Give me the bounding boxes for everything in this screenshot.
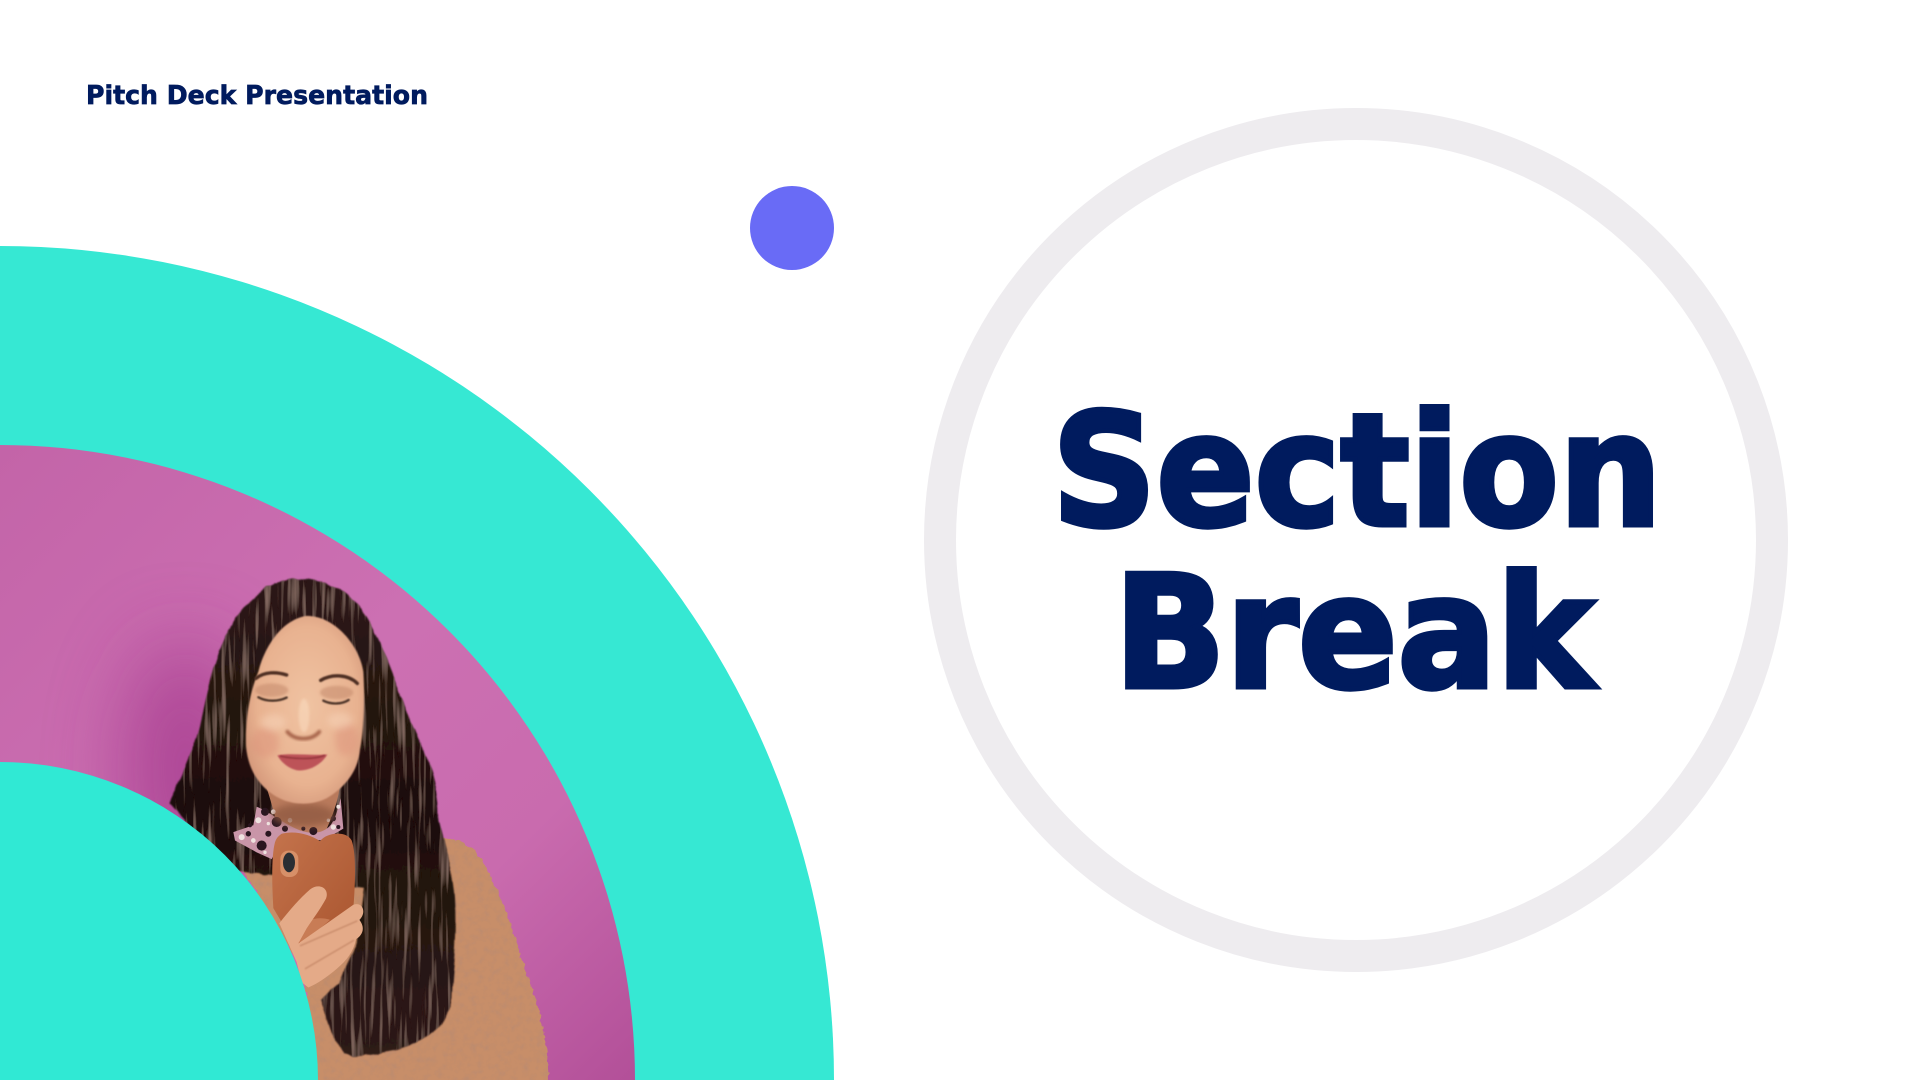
large outer teal quarter circle — [0, 246, 834, 1080]
purple backdrop — [0, 445, 640, 1080]
collar light petals — [239, 805, 340, 854]
eyelid shading — [255, 683, 288, 697]
finger creases — [300, 921, 357, 969]
heading line: Break: Break — [1114, 542, 1597, 724]
face shape — [246, 616, 364, 804]
left eyebrow — [256, 673, 287, 678]
inner teal quarter circle — [0, 762, 318, 1080]
phone lower bump — [299, 918, 330, 942]
left eye — [258, 697, 287, 701]
right eye — [323, 700, 349, 703]
photo panel: woman on purple backdrop — [0, 445, 640, 1080]
main heading — [1052, 380, 1662, 724]
floral collar — [233, 798, 343, 859]
cheek blush — [254, 728, 279, 756]
camera lens — [283, 853, 295, 872]
nose — [287, 732, 319, 739]
nose bridge highlight — [299, 699, 309, 732]
right eyelid shading — [320, 686, 353, 699]
backdrop shadow behind woman — [125, 640, 245, 900]
neck — [267, 788, 340, 833]
sweater — [243, 837, 548, 1080]
left cheek highlight — [261, 714, 286, 730]
collar print — [246, 808, 340, 851]
woman — [170, 579, 548, 1080]
collar base — [233, 798, 343, 859]
right cheek highlight — [327, 712, 353, 729]
deck title: Pitch Deck Presentation — [86, 81, 428, 111]
palm and fingers — [279, 886, 363, 987]
camera bezel — [280, 851, 298, 877]
hair — [170, 579, 456, 1056]
decorative purple dot — [750, 186, 834, 270]
phone — [272, 832, 355, 946]
right eyebrow — [321, 676, 357, 683]
face — [246, 616, 364, 804]
right cheek blush — [334, 725, 358, 755]
chin shadow — [272, 804, 335, 827]
large grey ring — [940, 124, 1772, 956]
lips — [277, 754, 327, 770]
phone body — [272, 832, 355, 945]
heading line: Section: Section — [1052, 380, 1662, 562]
lip line — [280, 755, 325, 759]
hand — [279, 886, 363, 987]
